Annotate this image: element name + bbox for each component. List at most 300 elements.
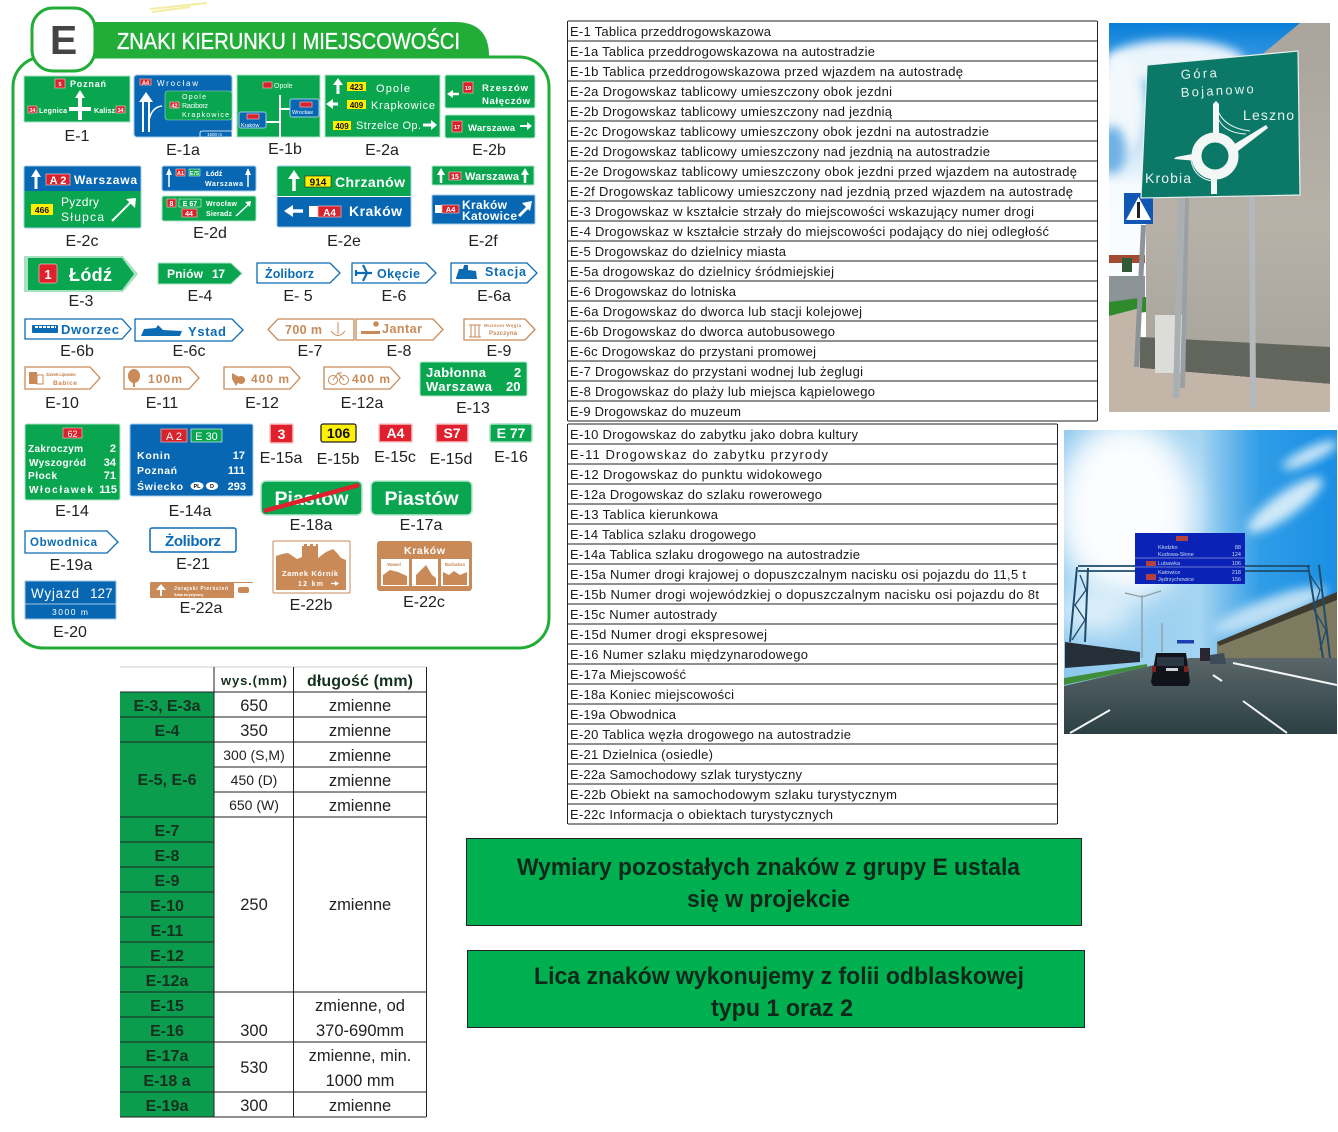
sign E-10: Zamek Lipowiec	[46, 372, 76, 377]
sign E-2b: Nałęczów	[482, 96, 531, 107]
sign E-2c: Warszawa	[74, 173, 137, 187]
sign E-3: Łódź	[69, 265, 112, 285]
sign E-14: 34	[104, 457, 117, 469]
sign E-1: Kalisz	[94, 108, 116, 115]
blue overhead sign	[1135, 533, 1245, 584]
list: sign names E-10 to E-22c: E-17a Miejscowość	[570, 667, 686, 682]
caption: E-6b	[60, 343, 94, 360]
sign E-19a	[25, 531, 118, 574]
row labels: E-12	[150, 948, 184, 965]
sign E-2b	[445, 75, 535, 159]
sign E-14a: PL	[193, 484, 201, 490]
callout: dimensions note: się w projekcie	[687, 886, 850, 913]
list: sign names E-1 to E-9: E-2a Drogowskaz tablicowy umieszczony obok jezdni	[570, 84, 892, 99]
list: sign names E-1 to E-9: E-6 Drogowskaz do lotniska	[570, 284, 737, 299]
sign E-10	[25, 367, 100, 412]
sign E-13: 2	[514, 365, 521, 380]
blue overhead sign: 124	[1232, 552, 1241, 558]
caption: E-2f	[468, 233, 498, 250]
blue overhead sign: Katowice	[1158, 570, 1180, 576]
sign E-11: 100m	[148, 372, 182, 386]
sign E-2a: 409	[335, 122, 349, 131]
callout: reflective foil note: typu 1 oraz 2	[711, 995, 853, 1022]
sign E-6a	[451, 263, 537, 305]
height values: 300 (S,M)	[223, 747, 285, 763]
sign E-2d: Łódź	[206, 171, 223, 178]
sign E-1a: Wrocław	[157, 79, 198, 88]
height values: 300	[240, 1022, 268, 1040]
blue overhead sign: 106	[1232, 561, 1241, 567]
caption: E-15a	[260, 450, 302, 467]
sign E-2d: 8	[170, 201, 174, 208]
header: green title tab: ZNAKI KIERUNKU I MIEJSCOWOŚCI	[117, 27, 460, 54]
green direction sign: Krobia	[1145, 170, 1191, 186]
sign E-17a: Piastów	[384, 488, 459, 510]
sign E-2d	[162, 166, 256, 242]
sign E-1a: 1500 m	[207, 132, 222, 137]
caption: E-22b	[290, 597, 332, 614]
sign E-9	[464, 319, 535, 360]
sign E-15b: 106	[327, 425, 350, 441]
sign E-2c: 466	[35, 205, 49, 215]
row labels: E-15	[150, 998, 184, 1015]
sign E-22a: Jurajski Pierścień	[174, 586, 228, 592]
caption: E-2e	[327, 233, 361, 250]
sign E-1b	[237, 75, 320, 158]
sign E-18a: Piastów	[274, 488, 349, 510]
length values: zmienne, min.	[309, 1047, 411, 1065]
green direction sign: Bojanowo	[1180, 81, 1254, 100]
sign E-8: Jantar	[382, 322, 422, 336]
list: sign names E-10 to E-22c: E-15d Numer drogi ekspresowej	[570, 627, 767, 642]
list: sign names E-10 to E-22c: E-14 Tablica szlaku drogowego	[570, 527, 756, 542]
sign E-14a: A 2	[166, 431, 182, 443]
blue overhead sign: Lubawka	[1158, 561, 1181, 567]
sign E-6b	[25, 319, 131, 360]
sign E-2f: Warszawa	[465, 171, 520, 183]
caption: E-2d	[193, 225, 227, 242]
sign E-14a: 293	[228, 481, 246, 493]
sign E-1a: Opole	[182, 94, 206, 101]
green direction sign	[1141, 51, 1300, 198]
caption: E-18a	[290, 517, 332, 534]
sign E-14: Wyszogród	[29, 458, 86, 469]
list: sign names E-10 to E-22c: E-15b Numer drogi wojewódzkiej o dopuszczalnym nacisku osi pojazdu do 8t	[570, 587, 1039, 602]
sign E-1: Poznań	[70, 79, 106, 89]
caption: E-9	[487, 343, 512, 360]
table header: wys.(mm)	[220, 673, 287, 688]
caption: E-19a	[50, 557, 92, 574]
sign E-15c	[374, 424, 416, 466]
sign E-6: Okęcie	[377, 267, 420, 281]
sign E-1: Legnica	[39, 108, 67, 115]
sign E-12a	[324, 367, 400, 412]
sign E-18a	[261, 481, 362, 534]
sign E-14: Płock	[28, 471, 57, 482]
table header	[220, 673, 413, 690]
sign E-2f: Katowice	[462, 209, 517, 223]
list: sign names E-1 to E-9: E-2f Drogowskaz tablicowy umieszczony nad jezdnią przed wjazdem na autostradę	[570, 184, 1073, 199]
height values: 250	[240, 896, 268, 914]
list: sign names E-10 to E-22c: E-18a Koniec miejscowości	[570, 687, 734, 702]
caption: E-15b	[317, 451, 359, 468]
sign E-6c: Ystad	[188, 324, 226, 339]
sign E-14a: 111	[228, 465, 245, 477]
caption: E-12a	[341, 395, 383, 412]
sign E-9: Muzeum Węgla	[484, 323, 521, 328]
sign E-16: E 77	[497, 425, 526, 441]
list: sign names E-1 to E-9: E-5 Drogowskaz do dzielnicy miasta	[570, 244, 787, 259]
list: sign names E-10 to E-22c: E-12 Drogowskaz do punktu widokowego	[570, 467, 822, 482]
sign E-6a: Stacja	[485, 265, 527, 279]
sign E-2f: Kraków	[462, 198, 508, 212]
height values: 530	[240, 1059, 268, 1077]
row labels	[134, 698, 201, 1115]
sign E-14a: Konin	[137, 450, 170, 462]
sign E-10: Babice	[53, 380, 77, 387]
list: sign names E-10 to E-22c: E-22a Samochodowy szlak turystyczny	[570, 767, 802, 782]
list: sign names E-10 to E-22c: E-21 Dzielnica (osiedle)	[570, 747, 713, 762]
list: sign names E-10 to E-22c: E-12a Drogowskaz do szlaku rowerowego	[570, 487, 822, 502]
height values	[223, 697, 285, 1115]
row labels: E-16	[150, 1023, 184, 1040]
sign E-13	[420, 362, 527, 417]
list: sign names E-1 to E-9: E-4 Drogowskaz w kształcie strzały do miejscowości podający do niej odległość	[570, 224, 1050, 239]
callout: reflective foil note: Lica znaków wykonujemy z folii odblaskowej	[534, 963, 1024, 990]
sign E-2b: Rzeszów	[482, 83, 529, 94]
list: sign names E-10 to E-22c: E-15c Numer autostrady	[570, 607, 718, 622]
callout: dimensions note	[466, 838, 1082, 926]
sign E-12a: 400 m	[352, 372, 390, 386]
sign E-15d: S7	[443, 425, 461, 441]
sign E-22a: Szlak turystyczny	[174, 593, 203, 597]
caption: E-11	[146, 395, 178, 412]
sign E-13: 20	[506, 379, 520, 394]
row labels: E-11	[151, 923, 184, 940]
sign E-15d	[430, 424, 472, 468]
caption: E-12	[245, 395, 279, 412]
sign E-14: 2	[110, 443, 116, 455]
height values: 650 (W)	[229, 797, 279, 813]
length values: 1000 mm	[326, 1072, 394, 1090]
sign E-7	[268, 319, 354, 360]
caption: E-17a	[400, 517, 442, 534]
sign E-1b: Wrocław	[292, 110, 313, 116]
caption: E-10	[45, 395, 79, 412]
caption: E-15c	[374, 449, 416, 466]
row labels: E-10	[150, 898, 184, 915]
sign E-14: Włocławek	[29, 485, 93, 496]
sign E-14: 62	[67, 429, 78, 439]
sign E-12	[224, 367, 300, 412]
callout: dimensions note: Wymiary pozostałych znaków z grupy E ustala	[517, 854, 1021, 881]
sign E-1a: Krapkowice	[182, 112, 229, 119]
sign E-4: 17	[212, 267, 225, 281]
car on road	[1151, 648, 1226, 686]
row labels: E-8	[155, 848, 180, 865]
letter E badge: E	[50, 17, 77, 63]
list: sign names E-1 to E-9: E-1 Tablica przeddrogowskazowa	[570, 24, 772, 39]
sign E-2e: 914	[310, 178, 327, 188]
row labels: E-17a	[146, 1048, 188, 1065]
sign E-2e: A4	[323, 208, 336, 219]
list: sign names E-1 to E-9: E-5a drogowskaz do dzielnicy śródmiejskiej	[570, 264, 834, 279]
sign E-1a: A4	[142, 80, 150, 86]
sign E-22c: Barbakan	[445, 562, 466, 567]
sign E-19a: Obwodnica	[30, 537, 98, 549]
blue overhead sign: 88	[1235, 545, 1241, 551]
caption: E-2c	[66, 233, 98, 250]
sign E-1b: Opole	[274, 83, 293, 90]
length values: zmienne, od	[315, 997, 405, 1015]
sign E-9: Pszczyna	[489, 331, 518, 337]
sign E-2a: 423	[350, 83, 364, 92]
caption: E-6	[382, 288, 407, 305]
sign E-2a: 409	[350, 101, 364, 110]
sign E-20: 3000 m	[52, 607, 88, 617]
sign E-7: 700 m	[285, 323, 322, 337]
sign E-22a	[150, 582, 253, 617]
sign E-22c: Wawel	[387, 562, 401, 567]
list: sign names E-1 to E-9: E-9 Drogowskaz do muzeum	[570, 404, 741, 419]
row labels: E-7	[155, 823, 180, 840]
caption: E- 5	[283, 288, 313, 305]
sign E-11	[124, 367, 199, 412]
length values: zmienne	[329, 722, 391, 740]
sign E-2d: E 67	[183, 201, 197, 208]
sign E-2a: Opole	[376, 83, 410, 95]
sign E-13: Jabłonna	[426, 365, 487, 380]
caption: E-14	[55, 503, 89, 520]
blue overhead sign: Kłodzko	[1158, 545, 1178, 551]
list: sign names E-1 to E-9: E-1a Tablica przeddrogowskazowa na autostradzie	[570, 44, 875, 59]
sign E-2d: Sieradz	[206, 211, 232, 218]
sign E-22c: Kraków	[404, 545, 446, 557]
height values: 450 (D)	[231, 772, 277, 788]
row labels: E-3, E-3a	[134, 698, 201, 715]
sign E-3	[24, 256, 138, 310]
length values: zmienne	[329, 1097, 391, 1115]
sign E-2f: A4	[446, 205, 456, 214]
sign E-2c: Słupca	[61, 210, 104, 224]
sign E-2e: Chrzanów	[335, 174, 405, 190]
list: sign names E-1 to E-9: E-2c Drogowskaz tablicowy umieszczony obok jezdni na autostradzie	[570, 124, 989, 139]
sign E-5	[257, 263, 340, 305]
blue overhead sign: Jędrzychowice	[1158, 577, 1194, 583]
sign E-2b: Warszawa	[468, 123, 516, 134]
sign E-1b: Kraków	[241, 123, 259, 129]
list: sign names E-10 to E-22c: E-16 Numer szlaku międzynarodowego	[570, 647, 808, 662]
list: sign names E-10 to E-22c	[568, 424, 1058, 824]
sign E-15b	[317, 424, 359, 468]
list: sign names E-10 to E-22c: E-19a Obwodnica	[570, 707, 677, 722]
caption: E-3	[69, 293, 94, 310]
row labels: E-5, E-6	[138, 772, 197, 789]
length values: zmienne	[329, 747, 391, 765]
caption: E-21	[176, 556, 210, 573]
row labels: E-19a	[146, 1098, 188, 1115]
sign E-14a: D	[210, 484, 214, 490]
caption: E-14a	[169, 503, 211, 520]
sign E-2a	[325, 75, 440, 159]
header: green title tab	[80, 22, 489, 58]
sign E-2b: 19	[465, 86, 471, 92]
row labels: E-9	[155, 873, 180, 890]
caption: E-13	[456, 400, 490, 417]
sign E-15c: A4	[387, 425, 405, 441]
list: sign names E-1 to E-9: E-8 Drogowskaz do plaży lub miejsca kąpielowego	[570, 384, 875, 399]
sign E-6	[352, 263, 436, 305]
sign E-12: 400 m	[251, 372, 289, 386]
sign E-6c	[135, 319, 243, 360]
sign E-1: 34	[117, 108, 124, 114]
green direction sign: Leszno	[1243, 107, 1294, 123]
list: sign names E-1 to E-9	[568, 21, 1098, 421]
sign E-14: 115	[99, 484, 117, 496]
sign E-2c: A 2	[50, 175, 66, 187]
sign E-14	[25, 424, 120, 520]
table header: długość (mm)	[307, 673, 413, 690]
blue overhead sign: 218	[1232, 570, 1241, 576]
sign E-16	[490, 424, 532, 466]
sign E-22c	[377, 541, 472, 611]
gantry frame	[1070, 565, 1330, 658]
length values: zmienne	[329, 697, 391, 715]
caption: E-6a	[477, 288, 511, 305]
sign E-2e	[277, 166, 411, 250]
sign E-2d: Warszawa	[205, 181, 243, 188]
length values: zmienne	[329, 797, 391, 815]
photo: motorway gantry with blue sign	[1055, 420, 1338, 734]
list: sign names E-10 to E-22c: E-11 Drogowskaz do zabytku przyrody	[570, 447, 828, 462]
table: sign dimensions	[120, 667, 426, 1117]
sign E-2f: 15	[451, 174, 459, 181]
sign E-4: Pniów	[167, 267, 204, 281]
sign E-14a: 17	[233, 450, 245, 462]
list: sign names E-10 to E-22c: E-13 Tablica kierunkowa	[570, 507, 719, 522]
list: sign names E-1 to E-9: E-7 Drogowskaz do przystani wodnej lub żeglugi	[570, 364, 863, 379]
sign E-5: Żoliborz	[265, 266, 314, 281]
list: sign names E-10 to E-22c: E-14a Tablica szlaku drogowego na autostradzie	[570, 547, 860, 562]
caption: E-15d	[430, 451, 472, 468]
height values: 350	[240, 722, 268, 740]
sign E-22b: 12 km	[298, 581, 323, 588]
caption: E-16	[494, 449, 528, 466]
list: sign names E-1 to E-9: E-3 Drogowskaz w kształcie strzały do miejscowości wskazujący numer drogi	[570, 204, 1034, 219]
sign E-1a: Raciborz	[182, 103, 208, 110]
list: sign names E-1 to E-9: E-2d Drogowskaz tablicowy umieszczony nad jezdnią na autostradzie	[570, 144, 990, 159]
sign E-3: 1	[44, 267, 52, 282]
sign E-2a: Krapkowice	[371, 100, 435, 112]
sign E-20: 127	[90, 586, 113, 601]
sign E-15a	[260, 424, 302, 467]
list: sign names E-1 to E-9: E-6a Drogowskaz do dworca lub stacji kolejowej	[570, 304, 862, 319]
sign E-21: Żoliborz	[165, 533, 221, 550]
sign E-14a: Świecko	[137, 480, 183, 493]
row labels: E-12a	[146, 973, 188, 990]
sign E-1	[24, 76, 130, 145]
list: sign names E-10 to E-22c: E-22b Obiekt na samochodowym szlaku turystycznym	[570, 787, 897, 802]
caption: E-20	[53, 624, 87, 641]
sign E-13: Warszawa	[426, 379, 493, 394]
list: sign names E-1 to E-9: E-6b Drogowskaz do dworca autobusowego	[570, 324, 835, 339]
sign E-20: Wyjazd	[31, 586, 79, 601]
height values: 650	[240, 697, 268, 715]
sign E-2f	[432, 166, 535, 250]
list: sign names E-10 to E-22c: E-22c Informacja o obiektach turystycznych	[570, 807, 833, 822]
sign E-1: 34	[29, 108, 36, 114]
caption: E-1a	[166, 142, 200, 159]
panel: road sign catalogue	[13, 8, 549, 648]
sign E-2d: Wrocław	[206, 201, 238, 208]
pedestrian crossing sign	[1124, 193, 1153, 224]
callout: reflective foil note	[468, 950, 1084, 1028]
list: sign names E-1 to E-9: E-2b Drogowskaz tablicowy umieszczony nad jezdnią	[570, 104, 893, 119]
list: sign names E-10 to E-22c: E-15a Numer drogi krajowej o dopuszczalnym nacisku osi pojazdu do 11,5 t	[570, 567, 1026, 582]
photo: roundabout direction sign on building	[1094, 23, 1330, 412]
caption: E-6c	[173, 343, 205, 360]
sign E-14a: Poznań	[137, 465, 177, 477]
blue overhead sign: 156	[1232, 577, 1241, 583]
caption: E-22c	[403, 594, 445, 611]
sign E-8	[356, 319, 443, 360]
caption: E-1	[65, 128, 90, 145]
sign E-1: 5	[58, 82, 62, 88]
sign E-21	[150, 528, 236, 573]
caption: E-1b	[268, 141, 302, 158]
length values: zmienne	[329, 896, 391, 914]
green direction sign: Góra	[1180, 65, 1218, 82]
sign E-2c	[24, 166, 141, 250]
list: sign names E-10 to E-22c: E-10 Drogowskaz do zabytku jako dobra kultury	[570, 427, 858, 442]
length values: zmienne	[329, 772, 391, 790]
sign E-15a: 3	[278, 426, 286, 442]
sign E-4	[158, 263, 242, 305]
sign E-6b: Dworzec	[61, 322, 119, 337]
sign E-2a: Strzelce Op.	[356, 120, 421, 132]
caption: E-2b	[472, 142, 506, 159]
sign E-14: 71	[104, 470, 116, 482]
list: sign names E-1 to E-9: E-1b Tablica przeddrogowskazowa przed wjazdem na autostradę	[570, 64, 963, 79]
caption: E-2a	[365, 142, 399, 159]
list: sign names E-1 to E-9: E-6c Drogowskaz do przystani promowej	[570, 344, 816, 359]
height values: 300	[240, 1097, 268, 1115]
sign E-14: Zakroczym	[28, 444, 83, 455]
sign E-2d: A1	[177, 171, 184, 177]
sign E-17a	[371, 481, 472, 534]
caption: E-7	[298, 343, 323, 360]
list: sign names E-10 to E-22c: E-20 Tablica węzła drogowego na autostradzie	[570, 727, 851, 742]
length values	[309, 697, 411, 1115]
sign E-2d: E75	[190, 171, 199, 177]
sign E-2c: Pyzdry	[61, 195, 99, 209]
sign E-2e: Kraków	[349, 203, 402, 219]
sign E-1a	[134, 75, 232, 159]
row labels: E-18 a	[143, 1073, 191, 1090]
sign E-14a: E 30	[195, 431, 218, 443]
caption: E-4	[188, 288, 213, 305]
sign E-1a: 42	[171, 104, 178, 110]
caption: E-22a	[180, 600, 222, 617]
row labels: E-4	[155, 723, 180, 740]
list: sign names E-1 to E-9: E-2e Drogowskaz tablicowy umieszczony obok jezdni przed wjazdem na autostradę	[570, 164, 1077, 179]
sign E-2b: 17	[454, 125, 460, 131]
blue overhead sign: Kudowa-Słone	[1158, 552, 1194, 558]
sign E-22b: Zamek Kórnik	[282, 569, 339, 578]
sign E-22b	[273, 541, 350, 614]
sign E-14a	[130, 424, 253, 520]
sign E-2d: 44	[185, 211, 193, 218]
